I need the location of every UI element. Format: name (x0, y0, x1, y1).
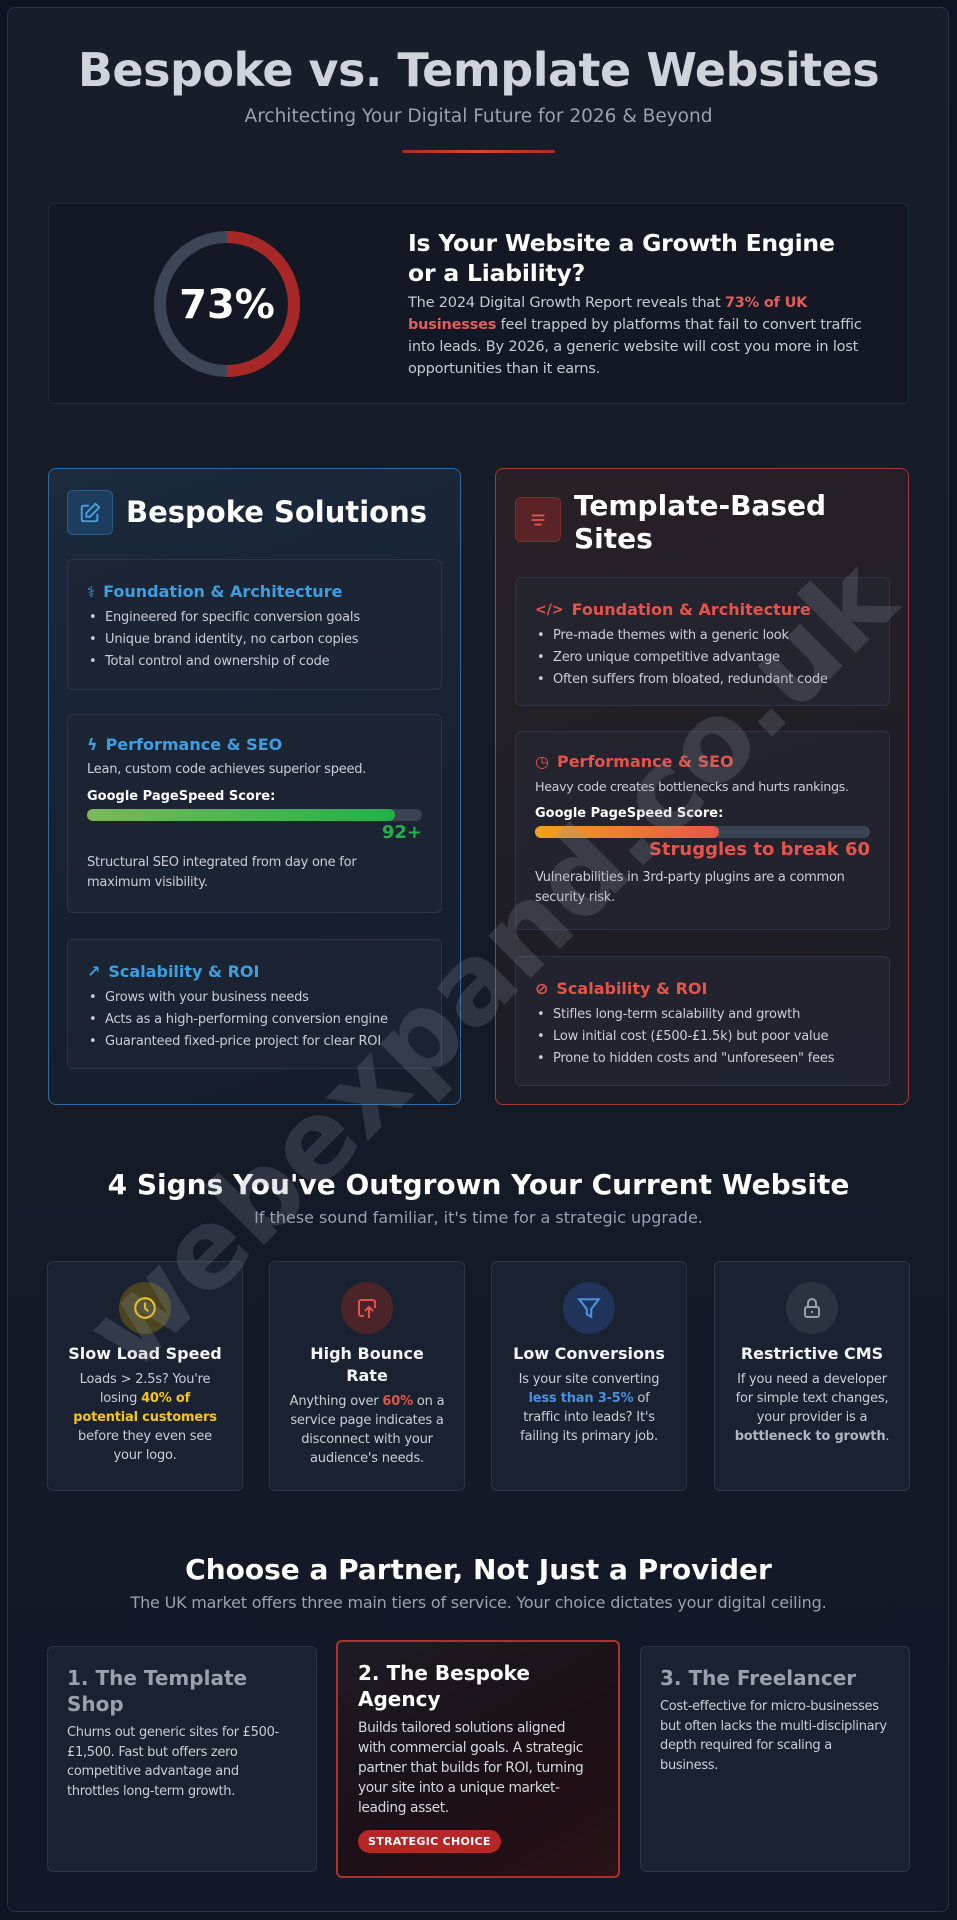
card: foundation: Often suffers from bloated, redundant code (553, 672, 828, 687)
card: foundation: ⚕ (87, 582, 95, 600)
card: performance: Google PageSpeed Score: (87, 789, 275, 804)
heading: or a Liability? (408, 259, 585, 287)
card: performance: Performance & SEO (557, 752, 734, 771)
card: performance: Vulnerabilities in 3rd-party plugins are a common security risk. (535, 870, 845, 905)
card: foundation: Zero unique competitive advantage (553, 650, 780, 665)
sign card: bounce: High Bounce (310, 1344, 424, 1363)
sign card: bounce: Anything over 60% on a service page indicates a disconnect with your audience's needs. (290, 1394, 444, 1466)
sign card: bounce (269, 1261, 465, 1491)
sign card: slow load: Loads > 2.5s? You're losing 40% of potential customers before they even see your logo. (73, 1372, 217, 1463)
card: performance: Structural SEO integrated from day one for maximum visibility. (87, 855, 356, 890)
heading: 4 signs: 4 Signs You've Outgrown Your Current Website (108, 1168, 849, 1201)
badge: STRATEGIC CHOICE (368, 1835, 491, 1848)
heading: Sites (574, 522, 653, 555)
card: scalability: ↗ (87, 962, 100, 981)
card: scalability: Prone to hidden costs and "unforeseen" fees (553, 1051, 834, 1066)
heading: Is Your Website a Growth Engine (408, 229, 835, 257)
card: foundation: Total control and ownership of code (105, 654, 329, 669)
tier: freelancer: Cost-effective for micro-businesses but often lacks the multi-disciplinary depth required for scaling a business. (660, 1699, 887, 1772)
card: performance: ◷ (535, 752, 549, 771)
sign card: conversions (491, 1261, 687, 1491)
card: scalability: ⊘ (535, 979, 548, 998)
card: foundation: Unique brand identity, no carbon copies (105, 632, 358, 647)
watermark: webexpand.co.uk (61, 536, 919, 1394)
heading: Template-Based (574, 489, 826, 522)
icon: funnel (563, 1282, 615, 1334)
card: performance: ϟ (87, 735, 98, 754)
card: foundation: Foundation & Architecture (103, 582, 342, 601)
heading (408, 229, 835, 287)
card: performance: Heavy code creates bottlenecks and hurts rankings. (535, 779, 849, 794)
body text: The 2024 Digital Growth Report reveals that 73% of UK businesses feel trapped by platforms that fail to convert traffic into leads. By 2026, a generic website will cost you more in lost opportunities than it earns. (408, 295, 862, 377)
heading: choose a partner: Choose a Partner, Not Just a Provider (185, 1553, 772, 1586)
tier: template shop (47, 1646, 317, 1872)
subheading: If these sound familiar, it's time for a strategic upgrade. (254, 1208, 703, 1227)
card: foundation (515, 577, 890, 706)
card: foundation: Engineered for specific conversion goals (105, 610, 360, 625)
card: performance (515, 731, 890, 930)
sign card: slow load: Slow Load Speed (68, 1344, 222, 1363)
sign card: bounce: Rate (346, 1366, 388, 1385)
sign card: slow load (47, 1261, 243, 1491)
tier: freelancer (640, 1646, 910, 1872)
card: scalability: Grows with your business needs (105, 990, 309, 1005)
badge (358, 1830, 501, 1853)
bar chart: under 60 (535, 826, 870, 838)
card: scalability (515, 956, 890, 1086)
panel: bespoke solutions (48, 468, 461, 1105)
card: foundation: </> (535, 602, 564, 618)
panel: template-based sites (495, 468, 909, 1105)
card: foundation: Foundation & Architecture (572, 600, 811, 619)
card: scalability: Guaranteed fixed-price project for clear ROI (105, 1034, 381, 1049)
card: scalability: Acts as a high-performing conversion engine (105, 1012, 388, 1027)
icon: menu (515, 497, 561, 542)
card: scalability: Stifles long-term scalability and growth (553, 1007, 800, 1022)
subtitle: Architecting Your Digital Future for 2026 & Beyond (245, 106, 712, 127)
tier: template shop: 1. The Template Shop (67, 1666, 247, 1716)
sign card: CMS (714, 1261, 910, 1491)
card: foundation: Pre-made themes with a generic look (553, 628, 789, 643)
card: scalability: Scalability & ROI (108, 962, 259, 981)
heading: Bespoke Solutions (126, 495, 427, 529)
card: performance: Lean, custom code achieves superior speed. (87, 762, 366, 777)
card: scalability (67, 939, 442, 1069)
tier: bespoke agency: Builds tailored solutions aligned with commercial goals. A strategic partner that builds for ROI, turning your site into a unique market-leading asset. (358, 1720, 583, 1816)
card: performance: 92+ (382, 822, 422, 843)
sign card: conversions: Low Conversions (513, 1344, 665, 1363)
sign card: CMS: If you need a developer for simple text changes, your provider is a bottleneck to growth. (735, 1372, 889, 1444)
tier: bespoke agency (336, 1640, 620, 1878)
sign card: conversions: Is your site converting less than 3-5% of traffic into leads? It's failing its primary job. (519, 1372, 659, 1444)
icon: lock (786, 1282, 838, 1334)
title underline (402, 150, 555, 153)
tier: template shop: Churns out generic sites for £500-£1,500. Fast but offers zero competitive advantage and throttles long-term growth. (67, 1725, 279, 1798)
donut chart 73% (154, 231, 300, 377)
icon: exit (341, 1282, 393, 1334)
card: performance: Performance & SEO (106, 735, 282, 754)
icon: edit (67, 490, 113, 535)
panel: stat intro (48, 203, 909, 404)
sign card: CMS: Restrictive CMS (741, 1344, 883, 1363)
card: performance (67, 714, 442, 913)
icon: clock (119, 1282, 171, 1334)
bar chart: 92 (87, 809, 422, 821)
card: scalability: Scalability & ROI (556, 979, 707, 998)
tier: freelancer: 3. The Freelancer (660, 1666, 856, 1690)
title: Bespoke vs. Template Websites (78, 43, 879, 97)
card: performance: Struggles to break 60 (649, 839, 870, 860)
card: foundation (67, 559, 442, 690)
card: performance: Google PageSpeed Score: (535, 806, 723, 821)
heading (574, 489, 826, 555)
card: scalability: Low initial cost (£500-£1.5k) but poor value (553, 1029, 828, 1044)
tier: bespoke agency: 2. The Bespoke Agency (358, 1661, 530, 1711)
subheading: The UK market offers three main tiers of service. Your choice dictates your digital ceiling. (131, 1593, 826, 1612)
donut chart 73%: 73% (179, 282, 275, 328)
